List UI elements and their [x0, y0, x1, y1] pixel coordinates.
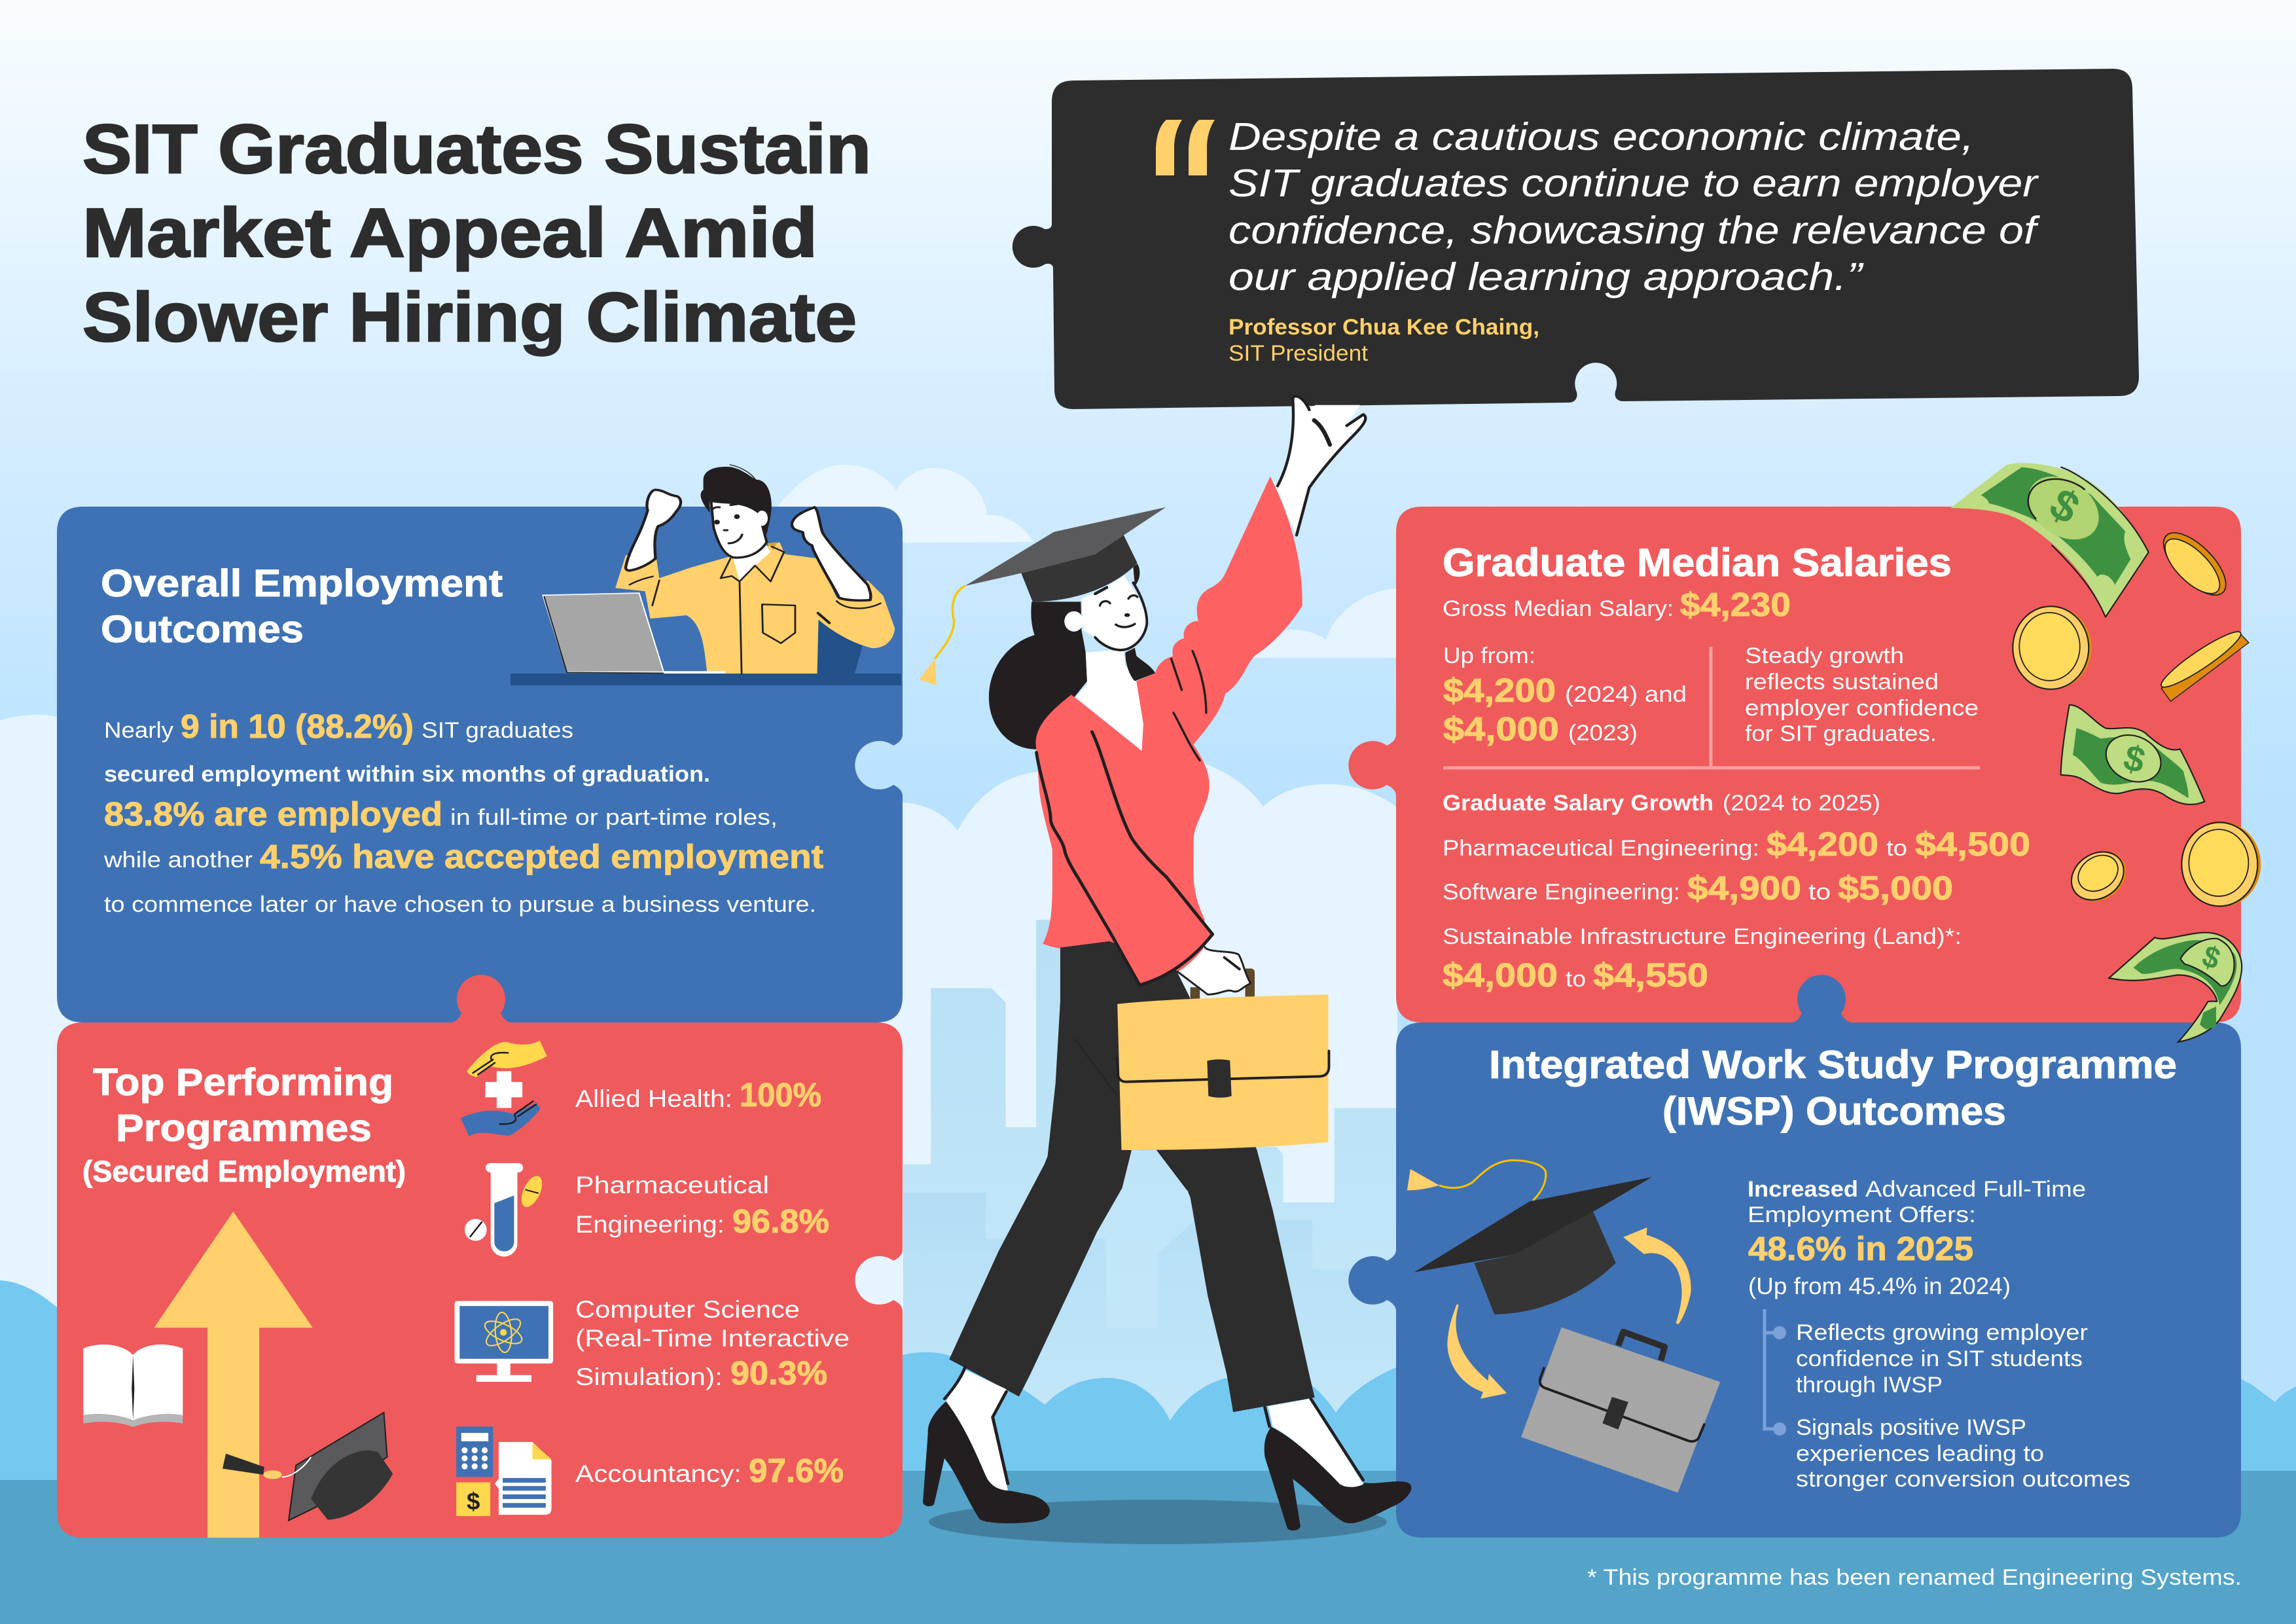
graduate salary growth: Software Engineering: [1443, 880, 1680, 905]
body text: employment figures [103, 708, 823, 917]
previous salaries: (2024) and [1565, 682, 1687, 707]
title: Market Appeal Amid [82, 194, 817, 272]
gross median salary [1443, 586, 1791, 623]
heading: top performing programmes: Top Performing [93, 1061, 393, 1104]
illustration: upward arrow, book and cap [83, 1212, 393, 1538]
icon: calculator, dollar and document: $ [467, 1488, 480, 1515]
heading: overall employment outcomes: Outcomes [101, 608, 304, 651]
panel: IWSP outcomes [1348, 975, 2241, 1538]
illustration: cap and briefcase cycle [1407, 1161, 1720, 1492]
body text: employment figures: secured employment within six months of graduation. [104, 762, 710, 787]
gross median salary: $4,230 [1680, 586, 1791, 623]
text: IWSP headline figure: Increased [1748, 1177, 1858, 1202]
text: IWSP headline figure [1748, 1177, 2086, 1299]
illustration: money and coins [1950, 463, 2261, 1042]
previous salaries: (2023) [1568, 721, 1638, 746]
programme results: Pharmaceutical [575, 1172, 769, 1199]
background: city skyline [903, 920, 1398, 1480]
woman: sleeve, hand and briefcase [1037, 732, 1329, 1150]
programme results: Simulation): [575, 1363, 723, 1390]
quote text: Despite a cautious economic climate, [1229, 115, 1974, 158]
quote attribution: SIT President [1229, 341, 1369, 366]
body text: employment figures: SIT graduates [422, 718, 573, 743]
icon: quotation mark [1156, 120, 1215, 175]
title [82, 111, 871, 356]
body text: employment figures: 83.8% are employed [104, 795, 442, 833]
note: steady growth: reflects sustained [1745, 670, 1939, 695]
graduate salary growth: to [1886, 836, 1907, 861]
icon: calculator, dollar and document [456, 1426, 552, 1516]
icon: banknote top and coins [1950, 463, 2249, 701]
previous salaries: Up from: [1443, 643, 1535, 668]
illustration: celebrating man at laptop [511, 465, 901, 685]
quote attribution: Professor Chua Kee Chaing, [1229, 315, 1539, 340]
woman: trousers [949, 941, 1315, 1412]
text: IWSP headline figure: 48.6% in 2025 [1748, 1230, 1973, 1267]
graduate salary growth: $4,550 [1593, 956, 1708, 994]
quote attribution [1229, 315, 1539, 366]
body text: employment figures: Nearly [104, 718, 173, 743]
woman: head and torso [919, 477, 1302, 983]
woman: shoes and ankles [923, 1367, 1411, 1530]
note: steady growth: Steady growth [1745, 643, 1904, 668]
text: IWSP headline figure: Employment Offers: [1748, 1202, 1976, 1227]
bullet text: confidence in SIT students [1796, 1346, 2083, 1371]
gross median salary: Gross Median Salary: [1443, 596, 1674, 621]
title: SIT Graduates Sustain [82, 111, 871, 188]
graduate salary growth: Graduate Salary Growth [1443, 791, 1713, 816]
woman: raised arm and hand [1270, 395, 1367, 535]
note: steady growth [1745, 643, 1979, 746]
bullet connector [1765, 1309, 1786, 1435]
background: hills [0, 1280, 2296, 1480]
body text: employment figures: 4.5% have accepted employment [260, 838, 823, 875]
icon: computer monitor with atom [455, 1301, 553, 1382]
quote text [1229, 115, 2041, 298]
body text: employment figures: to commence later or have chosen to pursue a business venture. [104, 892, 816, 917]
icon: banknote middle: $ [2119, 736, 2149, 781]
heading: overall employment outcomes [101, 562, 503, 651]
icon: coins lower and banknote bottom: $ [2198, 939, 2225, 976]
bullet text: Signals positive IWSP [1796, 1415, 2026, 1440]
heading: top performing programmes: (Secured Employment) [82, 1155, 406, 1188]
programme results: Allied Health: [575, 1085, 732, 1112]
body text: employment figures: 9 in 10 (88.2%) [181, 708, 414, 745]
icon: banknote middle [2061, 705, 2204, 804]
text: IWSP headline figure: Advanced Full-Time [1865, 1177, 2086, 1202]
bullet text: through IWSP [1796, 1373, 1943, 1398]
background: ground [0, 1471, 2296, 1624]
graduate salary growth: to [1808, 880, 1831, 905]
quote text: SIT graduates continue to earn employer [1229, 162, 2039, 205]
heading: top performing programmes: Programmes [116, 1107, 372, 1149]
previous salaries: $4,000 [1443, 710, 1559, 748]
previous salaries [1443, 643, 1687, 748]
programme results: (Real-Time Interactive [575, 1325, 850, 1352]
text: IWSP headline figure: (Up from 45.4% in 2024) [1748, 1272, 2011, 1299]
heading: IWSP outcomes [1489, 1043, 2177, 1133]
heading: IWSP outcomes: (IWSP) Outcomes [1662, 1089, 2006, 1133]
programme results: Computer Science [575, 1296, 800, 1323]
bullet text: stronger conversion outcomes [1796, 1467, 2130, 1492]
note: steady growth: for SIT graduates. [1745, 721, 1937, 746]
graduate salary growth: Pharmaceutical Engineering: [1443, 836, 1759, 861]
graduate salary growth: (2024 to 2025) [1723, 791, 1880, 816]
icon: test tube and pills [465, 1163, 547, 1257]
graduate salary growth: to [1566, 967, 1586, 992]
programme results [575, 1076, 850, 1489]
graduate salary growth: $4,000 [1443, 956, 1558, 994]
icon: caring hands with medical cross [461, 1041, 547, 1136]
panel: overall employment outcomes [57, 465, 903, 1022]
background: clouds [0, 465, 1401, 1506]
heading: graduate median salaries: Graduate Median Salaries [1443, 541, 1952, 585]
graduate salary growth [1443, 791, 2030, 994]
note: steady growth: employer confidence [1745, 696, 1979, 721]
walking figure ground shadow [929, 1500, 1387, 1544]
programme results: 100% [740, 1076, 821, 1113]
previous salaries: $4,200 [1443, 672, 1556, 709]
panel: graduate median salaries [1348, 507, 2241, 1022]
graduate salary growth: $5,000 [1838, 869, 1953, 907]
body text: employment figures: in full-time or part-time roles, [450, 805, 778, 830]
bullet text: experiences leading to [1796, 1441, 2044, 1466]
heading: overall employment outcomes: Overall Employment [101, 562, 503, 605]
programme results: Accountancy: [575, 1460, 742, 1487]
programme results: Engineering: [575, 1211, 725, 1238]
heading: IWSP outcomes: Integrated Work Study Programme [1489, 1043, 2177, 1087]
bullet text [1796, 1320, 2130, 1492]
icon: coins lower and banknote bottom [2063, 822, 2261, 1042]
heading: top performing programmes [82, 1061, 406, 1188]
graduate salary growth: $4,900 [1687, 869, 1801, 907]
illustration: graduate woman walking with briefcase [919, 395, 1411, 1530]
programme results: 97.6% [749, 1452, 844, 1489]
icon: banknote top and coins: $ [2041, 479, 2087, 533]
body text: employment figures: while another [103, 848, 253, 873]
bullet text: Reflects growing employer [1796, 1320, 2088, 1345]
programme results: 90.3% [730, 1354, 827, 1392]
programme results: 96.8% [732, 1202, 829, 1240]
footnote: * This programme has been renamed Engineering Systems. [1587, 1565, 2242, 1590]
panel: top performing programmes [57, 975, 903, 1538]
graduate salary growth: $4,200 [1767, 825, 1878, 863]
graduate salary growth: Sustainable Infrastructure Engineering (Land)*: [1443, 924, 1962, 949]
title: Slower Hiring Climate [82, 279, 857, 356]
graduate salary growth: $4,500 [1915, 825, 2030, 863]
panel: quote [1013, 69, 2139, 409]
quote text: our applied learning approach.” [1229, 255, 1864, 298]
quote text: confidence, showcasing the relevance of [1229, 209, 2041, 252]
